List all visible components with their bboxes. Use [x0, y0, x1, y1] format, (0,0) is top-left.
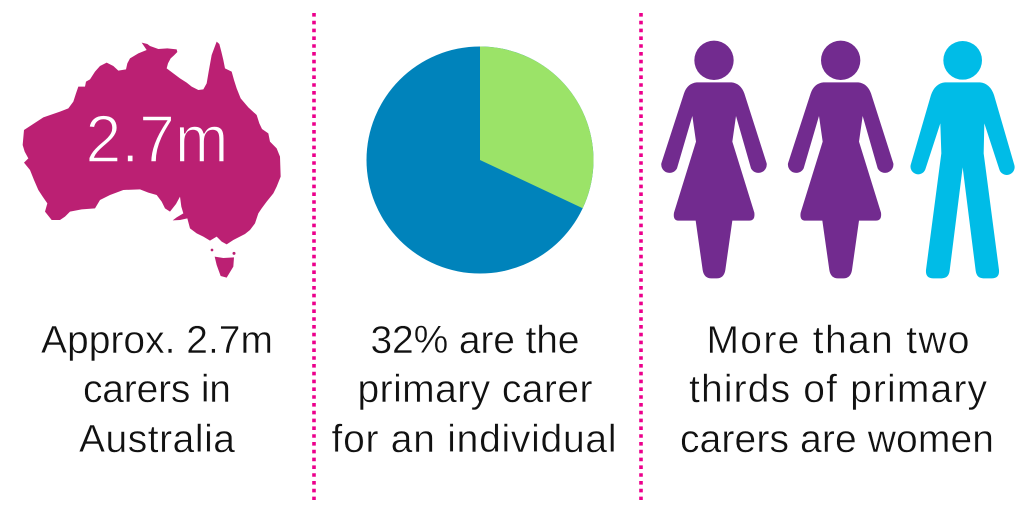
icon: man — [910, 41, 1015, 278]
caption: more than two thirds — [680, 319, 994, 461]
caption: 32 percent: 32% are the — [370, 319, 580, 362]
caption: 32 percent — [332, 319, 616, 461]
caption: approx 2.7m: carers in — [83, 368, 231, 411]
map figure 2.7m: 2.7m — [86, 102, 228, 177]
panel: Australia carers — [23, 42, 281, 461]
panel: primary carer share — [332, 46, 616, 461]
caption: approx 2.7m — [41, 319, 273, 461]
caption: more than two thirds: carers are women — [680, 418, 994, 461]
pie chart: 32 percent — [366, 46, 594, 274]
caption: approx 2.7m: Australia — [79, 418, 235, 461]
caption: more than two thirds: More than two — [706, 319, 970, 362]
caption: more than two thirds: thirds of primary — [689, 368, 988, 411]
icon: woman two — [788, 41, 893, 278]
caption: 32 percent: for an individual — [332, 418, 616, 461]
caption: 32 percent: primary carer — [358, 368, 592, 411]
icon: map of Australia — [23, 42, 281, 278]
icon: woman one — [661, 41, 767, 278]
panel: women carers — [661, 41, 1015, 461]
caption: approx 2.7m: Approx. 2.7m — [41, 319, 273, 362]
